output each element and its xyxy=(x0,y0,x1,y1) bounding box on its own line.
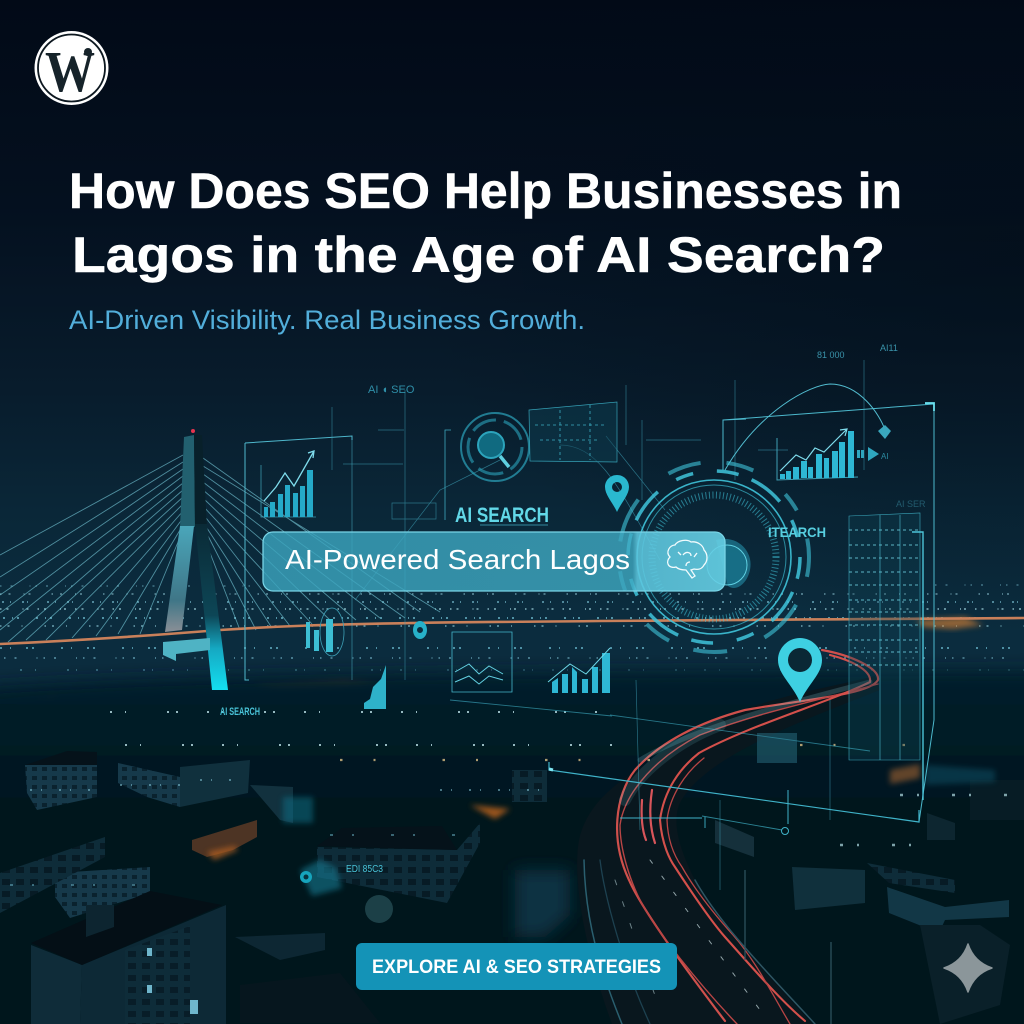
search bar xyxy=(263,532,725,591)
HUD: lower frame lines xyxy=(450,700,919,834)
HUD: upper data panel xyxy=(529,402,617,462)
HUD: lower small chart xyxy=(364,621,610,709)
orange city glow xyxy=(0,617,983,714)
HUD: label AI SEARCH: AI SEARCH xyxy=(455,504,549,527)
dark city ground xyxy=(0,670,1024,1024)
connecting arc xyxy=(725,384,885,470)
HUD: small labels xyxy=(817,343,926,509)
call-to-action button xyxy=(356,943,677,990)
title: How Does SEO Help Businesses in xyxy=(69,163,902,219)
HUD: label AI SEARCH xyxy=(445,430,549,527)
logo: WordPress mark: W xyxy=(45,39,95,104)
HUD: left chart panel xyxy=(245,384,415,680)
AI small label: AI ◖ SEO xyxy=(368,384,415,396)
search bar text: AI-Powered Search Lagos xyxy=(285,544,630,575)
icon: small location pin xyxy=(605,475,629,512)
small lower chart xyxy=(306,608,344,656)
bar chart rising xyxy=(777,429,858,480)
subtitle: AI-Driven Visibility. Real Business Growth. xyxy=(69,305,585,335)
distant city lights xyxy=(0,585,1024,714)
title xyxy=(69,163,902,283)
foreground apartment block xyxy=(31,891,226,1024)
HUD: AI brain magnifier xyxy=(461,413,529,481)
bridge deck xyxy=(0,618,1024,644)
icon: sparkle star xyxy=(944,944,992,992)
bar chart rising xyxy=(261,451,316,517)
bridge cables xyxy=(0,455,440,642)
HUD: central radar rings xyxy=(619,462,809,652)
HUD: SEARCH radar label: ITEARCH xyxy=(768,524,826,540)
HUD: small labels: 81 000 xyxy=(817,350,845,360)
icon: brain xyxy=(668,540,707,578)
text: street label with icon: EDI 85C3 xyxy=(346,864,383,875)
suspension bridge xyxy=(0,429,1024,690)
HUD: small labels: AI11 xyxy=(880,343,898,353)
street lamp and pole xyxy=(745,870,831,1024)
HUD: small labels: AI SER xyxy=(896,499,926,509)
highway xyxy=(577,650,880,1024)
call-to-action button: EXPLORE AI & SEO STRATEGIES xyxy=(372,957,661,978)
bridge tower xyxy=(180,435,195,527)
text: AI SEARCH street label: AI SEARCH xyxy=(220,706,260,718)
city buildings xyxy=(0,751,1024,1024)
large location pin xyxy=(778,638,822,702)
title: Lagos in the Age of AI Search? xyxy=(72,227,885,283)
window lights xyxy=(10,712,1020,885)
lower building glows xyxy=(207,764,995,923)
logo: WordPress mark xyxy=(34,31,108,105)
HUD: right chart panel: AI xyxy=(881,452,889,461)
HUD: holographic skyscraper xyxy=(849,513,923,800)
text: street label with icon xyxy=(300,864,383,883)
HUD thin guide lines xyxy=(332,360,864,890)
HUD: right chart panel xyxy=(723,384,934,822)
